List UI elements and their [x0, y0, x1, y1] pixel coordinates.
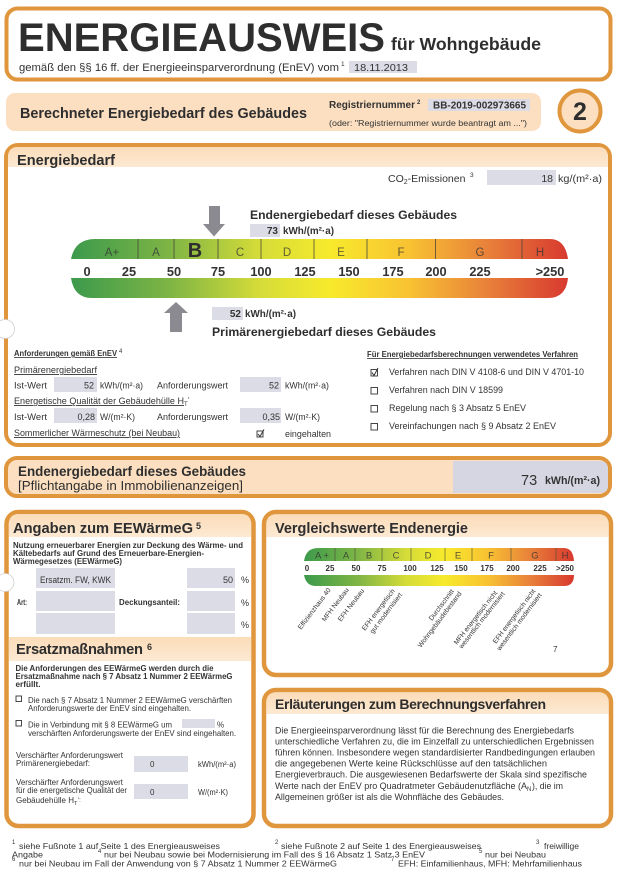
- rotated reference labels: gut modernisiert: [369, 592, 404, 635]
- small scale: numbers: 175: [480, 564, 494, 573]
- replacement measures description: Ersatzmaßnahme nach § 7 Absatz 1 Nummer 2 EEWärmeG: [16, 672, 232, 681]
- tightened requirement: building envelope: 0: [150, 788, 155, 797]
- tightened requirement: building envelope: für die energetische Qualität der: [16, 786, 127, 795]
- CO2 emissions: 3: [470, 172, 474, 179]
- final energy heading: Endenergiebedarf dieses Gebäudes: [250, 208, 457, 222]
- CO2 emissions: CO: [388, 173, 404, 185]
- footnotes: nur bei Neubau sowie bei Modernisierung im Fall des § 16 Absatz 1 Satz 3 EnEV: [104, 850, 425, 860]
- final energy value: kWh/(m²·a): [283, 226, 334, 237]
- small scale: class bar: B: [366, 550, 372, 562]
- option: percentage tightening: verschärften Anforderungswerte der EnEV sind eingehalten.: [28, 729, 236, 738]
- footnotes: 1: [12, 840, 16, 846]
- requirements block: Ist-Wert: [14, 412, 48, 422]
- energy scale: numbers: 150: [338, 264, 360, 279]
- type and share table: %: [241, 598, 249, 608]
- rotated reference labels: Durchschnitt: [428, 588, 456, 622]
- footnotes: EFH: Einfamilienhaus, MFH: Mehrfamilienhaus: [398, 858, 582, 868]
- type and share table: %: [241, 575, 249, 585]
- type and share table: 50: [223, 575, 233, 585]
- tightened requirement: building envelope: ′:: [78, 798, 81, 804]
- primary energy heading: Primärenergiebedarf dieses Gebäudes: [212, 325, 436, 339]
- energy scale: class bar: B: [188, 240, 202, 262]
- explanation text: Die Energieeinsparverordnung lässt für die Berechnung des Energiebedarfs: [275, 726, 574, 736]
- summary heading: Endenergiebedarf dieses Gebäudes: [18, 464, 246, 479]
- method block: Vereinfachungen nach § 9 Absatz 2 EnEV: [389, 421, 556, 431]
- requirements block: Sommerlicher Wärmeschutz (bei Neubau): [14, 428, 180, 438]
- icon: page number circle: 2: [573, 98, 587, 126]
- energy scale: class bar: G: [476, 247, 485, 259]
- primary energy value: 52: [230, 309, 241, 320]
- small scale: numbers: 125: [430, 564, 444, 573]
- replacement measures description: [16, 664, 232, 689]
- footnotes: nur bei Neubau: [485, 850, 546, 860]
- tightened requirement: primary energy: 0: [150, 760, 155, 769]
- energy scale: numbers: 175: [382, 264, 404, 279]
- small scale: class bar: F: [488, 550, 494, 562]
- small scale: class bar: H: [562, 550, 569, 562]
- small scale: class bar: G: [531, 550, 539, 562]
- method block: Verfahren nach DIN V 18599: [389, 385, 503, 395]
- tightened requirement: primary energy: [16, 751, 236, 772]
- explanation text: führen können. Insbesondere wegen standardisierter Randbedingungen erlauben: [275, 748, 595, 758]
- tightened requirement: primary energy: Primärenergiebedarf:: [16, 759, 90, 768]
- tightened requirement: building envelope: T: [74, 801, 78, 807]
- option: percentage tightening: [16, 719, 236, 738]
- summary value: 73: [521, 473, 537, 489]
- explanation text: Werte nach der EnEV pro Quadratmeter Gebäudenutzfläche (A: [275, 781, 527, 791]
- panel: comparison values: [264, 512, 611, 675]
- registration number field: BB-2019-002973665: [433, 100, 526, 112]
- energy scale: class bar: A: [152, 247, 160, 259]
- type and share table: Art:: [17, 597, 27, 607]
- requirements block: kWh/(m²·a): [285, 380, 329, 390]
- small scale: numbers: 100: [403, 564, 417, 573]
- tightened requirement: primary energy: kWh/(m²·a): [198, 760, 236, 769]
- energy scale: primary energy bar: [71, 278, 568, 298]
- primary energy value: [212, 307, 296, 320]
- type and share table: %: [241, 620, 249, 630]
- footnotes: siehe Fußnote 2 auf Seite 1 des Energieausweises: [281, 841, 481, 851]
- panel: calculation method notes: [264, 690, 611, 826]
- tightened requirement: building envelope: [16, 778, 228, 807]
- option: percentage tightening: %: [217, 720, 224, 730]
- small scale: numbers: >250: [556, 564, 575, 573]
- rotated reference labels: [297, 587, 558, 654]
- small scale: numbers: 75: [378, 564, 387, 573]
- renewable energy description: Nutzung erneuerbarer Energien zur Deckung des Wärme- und: [13, 541, 243, 550]
- CO2 emissions: -Emissionen: [408, 173, 466, 185]
- energy scale: class bar: H: [536, 247, 544, 259]
- replacement measures description: erfüllt.: [16, 680, 40, 689]
- requirements block: 0,35: [262, 412, 280, 422]
- small scale: class bar: A +: [315, 550, 329, 562]
- rotated reference labels: Wohngebäudebestand: [417, 591, 464, 649]
- footnotes: 2: [275, 840, 279, 846]
- heading: replacement measures: Ersatzmaßnahmen: [16, 642, 143, 658]
- legal basis line: gemäß den §§ 16 ff. der Energieeinsparverordnung (EnEV) vom: [19, 62, 339, 74]
- energy scale: numbers: 225: [469, 264, 491, 279]
- CO2 emissions: 18: [541, 173, 553, 185]
- primary energy value: kWh/(m²·a): [245, 309, 296, 320]
- tightened requirement: building envelope: Gebäudehülle H: [16, 796, 74, 805]
- method block: [367, 350, 584, 431]
- small scale: numbers: [305, 564, 575, 573]
- date field: 18.11.2013: [354, 62, 408, 74]
- footnotes: siehe Fußnote 1 auf Seite 1 des Energieausweises: [19, 841, 220, 851]
- heading band: [266, 692, 608, 714]
- energy scale: numbers: 75: [211, 264, 225, 279]
- small scale: numbers: 225: [533, 564, 547, 573]
- method block: Für Energiebedarfsberechnungen verwendetes Verfahren: [367, 350, 578, 359]
- registration label: Registriernummer: [329, 99, 415, 111]
- requirements block: Anforderungswert: [157, 412, 228, 422]
- energy scale: numbers: 0: [83, 264, 91, 279]
- footnotes: 3: [536, 840, 540, 846]
- tightened requirement: primary energy: Verschärfter Anforderungswert: [16, 751, 124, 760]
- energy scale: class bar: E: [337, 247, 345, 259]
- small scale: class bar: [304, 548, 574, 562]
- icon: punch hole lower: [0, 574, 14, 592]
- energy scale: class bar: F: [397, 247, 405, 259]
- explanation text: Energieverbrauch. Die ausgewiesenen Bedarfswerte der Skala sind spezifische: [275, 770, 587, 780]
- summary note: [Pflichtangabe in Immobilienanzeigen]: [18, 478, 243, 493]
- energy scale: numbers: 50: [167, 264, 181, 279]
- small scale: numbers: 25: [326, 564, 335, 573]
- renewable energy description: [13, 541, 243, 566]
- replacement measures description: Die Anforderungen des EEWärmeG werden durch die: [16, 664, 214, 673]
- tightened requirement: building envelope: W/(m²·K): [198, 788, 228, 797]
- arrow: final energy marker: [203, 206, 225, 236]
- heading: Vergleichswerte Endenergie: [275, 521, 468, 537]
- final energy value: 73: [267, 226, 278, 237]
- heading: Erläuterungen zum Berechnungsverfahren: [275, 696, 546, 712]
- rotated reference labels: wesentlich modernisiert: [457, 591, 507, 651]
- requirements block: Primärenergiebedarf: [14, 365, 97, 375]
- method block: Regelung nach § 3 Absatz 5 EnEV: [389, 403, 526, 413]
- small scale: numbers: 200: [506, 564, 520, 573]
- explanation text: [275, 726, 595, 802]
- icon: punch hole upper: [0, 320, 14, 338]
- small scale: class bar: E: [455, 550, 461, 562]
- requirements block: 0,28: [77, 412, 95, 422]
- footnote mark 2: 2: [417, 100, 421, 106]
- type and share table: Ersatzm. FW, KWK: [40, 575, 111, 585]
- energy scale: class bar: [71, 239, 568, 262]
- footnotes: 7: [391, 857, 395, 863]
- requirements block: W/(m²·K): [285, 412, 320, 422]
- icon: page number circle: [560, 90, 600, 132]
- energy scale: numbers: 25: [122, 264, 136, 279]
- energy scale: numbers: >250: [536, 264, 564, 279]
- explanation text: Allgemeinen größer ist als die Wohnfläche des Gebäudes.: [275, 792, 504, 802]
- panel: calculated energy demand band: [6, 93, 541, 131]
- requirements block: Energetische Qualität der Gebäudehülle H: [14, 396, 184, 406]
- requirements block: Anforderungen gemäß EnEV: [14, 349, 118, 358]
- explanation text: ), die im: [532, 781, 563, 791]
- requirements block: 52: [269, 380, 279, 390]
- requirements block: kWh/(m²·a): [100, 380, 143, 390]
- type and share table: [17, 568, 249, 634]
- footnotes: 5: [479, 849, 483, 855]
- energy scale: numbers: 200: [425, 264, 447, 279]
- title: ENERGIEAUSWEIS: [18, 16, 385, 60]
- requirements block: 52: [84, 380, 94, 390]
- footnote mark 6: 6: [147, 642, 152, 652]
- energy scale: numbers: [83, 264, 564, 279]
- footnote mark 1: 1: [341, 61, 345, 68]
- type and share table: Deckungsanteil:: [119, 597, 180, 607]
- summary unit: kWh/(m²·a): [545, 475, 600, 487]
- heading: EEWärmeG: Angaben zum EEWärmeG: [13, 521, 193, 537]
- small scale: gradient bar: [304, 575, 574, 586]
- rotated reference labels: 7: [553, 645, 558, 654]
- replacement measures band: [9, 637, 251, 661]
- footnotes: 4: [98, 849, 102, 855]
- small scale: class bar: A: [343, 550, 350, 562]
- energy scale: class bar: C: [236, 247, 244, 259]
- panel heading band: [8, 147, 608, 167]
- CO2 emissions: [388, 170, 602, 186]
- panel: Energiebedarf: [6, 145, 610, 445]
- explanation text: unterschiedliche Verfahren zu, die im Einzelfall zu unterschiedlichen Ergebnissen: [275, 736, 594, 746]
- renewable energy description: Kältebedarfs auf Grund des Erneuerbare-Energien-: [13, 549, 204, 558]
- requirements block: ′: [188, 397, 190, 404]
- option: tightened requirements: Anforderungswerte der EnEV sind eingehalten.: [28, 704, 191, 713]
- small scale: numbers: 0: [305, 564, 310, 573]
- heading band: [266, 514, 608, 537]
- subtitle: für Wohngebäude: [391, 34, 541, 54]
- small scale: class bar: C: [393, 550, 400, 562]
- rotated reference labels: EFH Neubau: [337, 588, 366, 623]
- CO2 emissions: kg/(m²·a): [558, 173, 602, 185]
- energy scale: class bar: D: [283, 247, 291, 259]
- footnotes: nur bei Neubau im Fall der Anwendung von § 7 Absatz 1 Nummer 2 EEWärmeG: [19, 858, 337, 868]
- requirements block: [14, 349, 331, 439]
- final energy value: [250, 224, 334, 237]
- rotated reference labels: MFH Neubau: [321, 587, 351, 623]
- requirements block: Anforderungswert: [157, 380, 228, 390]
- rotated reference labels: MFH energetisch nicht: [453, 590, 499, 646]
- value field background: [453, 461, 608, 493]
- rotated reference labels: wesentlich modernisiert: [495, 592, 544, 653]
- footnote mark 5: 5: [196, 521, 201, 531]
- arrow: primary energy marker: [164, 302, 188, 332]
- small scale: class bar: D: [425, 550, 432, 562]
- band heading: Berechneter Energiebedarf des Gebäudes: [20, 106, 307, 122]
- energy scale: numbers: 125: [294, 264, 316, 279]
- small scale: numbers: 150: [454, 564, 468, 573]
- CO2 emissions: 2: [404, 179, 408, 186]
- method block: Verfahren nach DIN V 4108-6 und DIN V 4701-10: [389, 367, 584, 377]
- rotated reference labels: Effizienzhaus 40: [297, 587, 333, 631]
- small scale: numbers: 50: [352, 564, 361, 573]
- requirements block: W/(m²·K): [100, 412, 135, 422]
- explanation text: die angegebenen Werte keine Rückschlüsse auf den tatsächlichen: [275, 758, 547, 768]
- requirements block: eingehalten: [285, 429, 331, 439]
- panel: EEWärmeG and replacement measures: [6, 512, 254, 826]
- panel heading: Energiebedarf: [17, 153, 115, 169]
- tightened requirement: building envelope: Verschärfter Anforderungswert: [16, 778, 124, 787]
- option: tightened requirements: [16, 696, 232, 713]
- energy scale: class bar: A+: [105, 247, 119, 259]
- footnotes: [12, 840, 582, 868]
- option: percentage tightening: Die in Verbindung mit § 8 EEWärmeG um: [28, 720, 172, 730]
- rotated reference labels: EFH energetisch nicht: [492, 588, 537, 645]
- rotated reference labels: EFH energetisch: [361, 588, 397, 632]
- footnotes: Angabe: [12, 850, 43, 860]
- explanation text: N: [527, 787, 531, 793]
- registration note: (oder: "Registriernummer wurde beantragt am ..."): [329, 118, 527, 128]
- energy scale: numbers: 100: [250, 264, 272, 279]
- footnotes: 6: [12, 857, 16, 863]
- panel: final energy demand summary: [6, 458, 610, 496]
- renewable energy description: Wärmegesetzes (EEWärmeG): [13, 557, 122, 566]
- requirements block: T: [184, 402, 188, 408]
- requirements block: Ist-Wert: [14, 380, 48, 390]
- panel: header: [6, 8, 610, 80]
- option: tightened requirements: Die nach § 7 Absatz 1 Nummer 2 EEWärmeG verschärften: [28, 696, 232, 705]
- heading band: [9, 514, 251, 537]
- requirements block: 4: [119, 349, 123, 355]
- footnotes: freiwillige: [544, 841, 579, 851]
